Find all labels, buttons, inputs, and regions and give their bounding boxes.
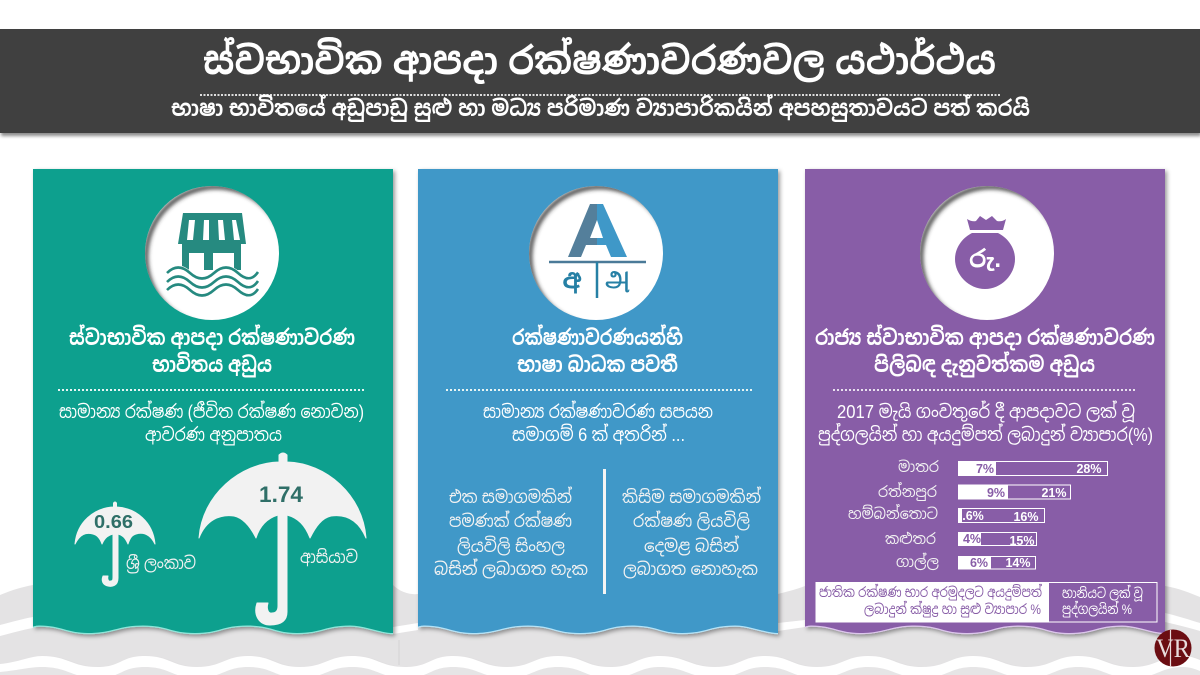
icon: large umbrella Asia 1.74: 1.74 [259, 482, 303, 507]
heading: භාෂා බාධක පවතී [517, 353, 678, 377]
text block: left column: පමණක් රක්ෂණ [449, 510, 572, 531]
heading [815, 324, 1155, 378]
bar chart: districts: 21% [1041, 486, 1067, 500]
subtitle: භාෂා භාවිතයේ අඩුපාඩු සුළු හා මධ්‍ය පරිමාණ ව්‍යාපාරිකයින් අපහසුතාවයට පත් කරයි [171, 94, 1030, 122]
text block: chart title: 2017 මැයි ගංවතුරේ දී ආපදාවට ලක් වූ [837, 400, 1135, 423]
icon: money bag [920, 186, 1061, 327]
icon: large umbrella Asia 1.74 [199, 453, 366, 625]
heading [69, 324, 355, 378]
text block: left column: බසින් ලබාගත හැක [434, 558, 588, 580]
legend [816, 582, 1157, 622]
text block: right column: දෙමළ බසින් [644, 535, 740, 557]
bar chart: districts: 6% [970, 556, 988, 570]
title: ස්වභාවික ආපදා රක්ෂණාවරණවල යථාර්ථය [203, 36, 996, 84]
text block: left column: ලියවිලි සිංහල [457, 536, 565, 557]
legend: ලබාදුන් ක්ෂුද්‍ර හා සුළු ව්‍යාපාර % [864, 601, 1041, 618]
legend: පුද්ගලයින් % [1062, 601, 1132, 618]
heading: ස්වාභාවික ආපදා රක්ෂණාවරණ [69, 324, 355, 351]
bar chart: districts: .6% [962, 509, 984, 523]
heading: රාජ්‍ය ස්වාභාවික ආපදා රක්ෂණාවරණ [815, 324, 1155, 351]
heading: භාවිතය අඩුය [152, 351, 272, 378]
text block: right column: කිසිම සමාගමකින් [622, 486, 762, 507]
bar chart: districts: 9% [987, 486, 1005, 500]
legend: හානියට ලක් වූ [1062, 585, 1143, 602]
text block: chart title: පුද්ගලයින් හා අයදුම්පත් ලබාදුන් ව්‍යාපාර(%) [818, 423, 1153, 446]
panel: language barriers (blue) [418, 169, 778, 634]
bar chart: districts: 16% [1013, 510, 1039, 524]
heading: පිලිබඳ දැනුවත්කම අඩුය [874, 351, 1095, 378]
bar chart: districts: මාතර [898, 459, 939, 476]
heading [512, 324, 683, 377]
text block: chart title [818, 400, 1153, 446]
text block: right column: ලබාගත නොහැක [623, 560, 758, 580]
heading: රක්ෂණාවරණයන්හි [512, 324, 683, 350]
text block: companies: සාමාන්‍ය රක්ෂණාවරණ සපයන [483, 400, 713, 422]
icon: small umbrella Sri Lanka 0.66: ශ්‍රී ලංකාව [126, 554, 196, 574]
panel: low insurance use (green) [33, 169, 393, 634]
header banner [0, 29, 1200, 133]
panel: low awareness (purple) [805, 169, 1165, 634]
logo: VR: VR [1156, 634, 1191, 663]
legend: ජාතික රක්ෂණ භාර අරමුදලට අයදුම්පත් [819, 584, 1042, 601]
icon: language letters [529, 186, 670, 327]
text block: ratio description [59, 400, 364, 446]
bar chart: districts: ගාල්ල [896, 553, 939, 571]
text block: left column [434, 486, 588, 580]
icon: money bag: රු. [969, 246, 1001, 273]
icon: language letters: අ [562, 264, 582, 294]
bar chart: districts: 4% [963, 532, 981, 546]
text block: right column [622, 486, 762, 580]
bar chart: districts: කළුතර [885, 531, 936, 548]
text block: companies [483, 400, 713, 445]
text block: right column: රක්ෂණ ලියවිලි [633, 510, 750, 532]
text block: ratio description: ආවරණ අනුපාතය [145, 425, 282, 446]
bar chart: districts: 14% [1005, 556, 1031, 570]
bar chart: districts: 15% [1009, 534, 1035, 548]
text block: left column: එක සමාගමකින් [449, 486, 573, 507]
icon: flooded shop [145, 186, 286, 327]
icon: small umbrella Sri Lanka 0.66 [75, 502, 196, 586]
icon: large umbrella Asia 1.74: ආසියාව [300, 548, 358, 567]
background: grey waves [0, 585, 1200, 675]
bar chart: districts: 7% [976, 462, 994, 476]
icon: language letters: அ [605, 264, 630, 294]
bar chart: districts: රත්නපුර [878, 482, 937, 501]
bar chart: districts: හම්බන්තොට [848, 504, 938, 523]
text block: ratio description: සාමාන්‍ය රක්ෂණ (ජීවිත රක්ෂණ නොවන) [59, 400, 364, 422]
icon: small umbrella Sri Lanka 0.66: 0.66 [94, 512, 133, 532]
bar chart: districts [848, 459, 1108, 571]
text block: companies: සමාගම් 6 ක් අතරින් ... [512, 423, 685, 445]
bar chart: districts: 28% [1076, 462, 1102, 476]
